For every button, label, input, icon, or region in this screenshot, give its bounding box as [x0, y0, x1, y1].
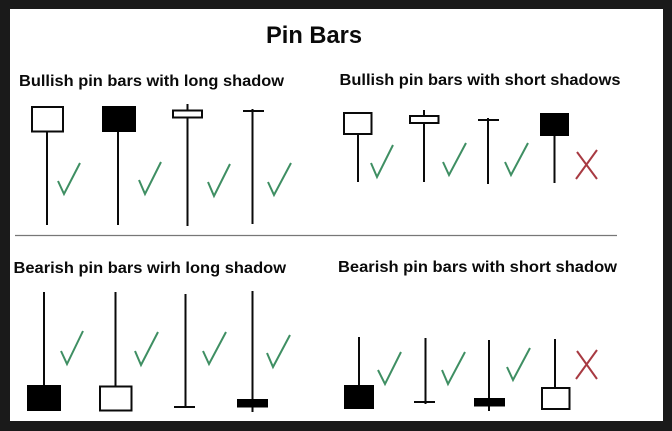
candle: flat bottom	[174, 294, 195, 408]
panel: bearish long shadow	[27, 291, 290, 412]
candle: small hollow body	[173, 104, 202, 226]
check mark	[371, 145, 393, 177]
check mark	[442, 352, 465, 384]
candle: flat top	[243, 109, 264, 224]
candle: small filled body	[237, 291, 268, 412]
cross mark	[576, 350, 597, 379]
candle: small filled body	[474, 340, 505, 411]
cross mark	[576, 150, 597, 179]
check mark	[58, 163, 80, 194]
candle: hollow body, long lower wick	[32, 107, 63, 225]
candle: small hollow body	[410, 110, 438, 182]
candle: hollow body	[542, 339, 570, 409]
check mark	[61, 331, 83, 364]
candle: filled body	[540, 113, 569, 183]
panel: bearish short shadow	[344, 337, 597, 411]
panel: bullish long shadow	[32, 104, 291, 226]
candle: hollow body	[344, 113, 372, 182]
candle: flat bottom	[414, 338, 435, 404]
check mark	[208, 164, 230, 196]
check mark	[378, 352, 401, 384]
check mark	[505, 143, 528, 175]
check mark	[139, 162, 161, 194]
candle: hollow body	[100, 292, 132, 410]
candle: flat top	[478, 118, 499, 184]
panel: bullish short shadows	[344, 110, 597, 184]
candle: filled body, long lower wick	[102, 106, 136, 225]
heading: bullish short shadows: Bullish pin bars with short shadows	[340, 72, 621, 89]
heading: bearish short shadow: Bearish pin bars with short shadow	[338, 259, 618, 276]
candle: filled body	[27, 292, 61, 411]
candle: filled body	[344, 337, 374, 409]
check mark	[268, 163, 291, 195]
heading: bullish long shadow: Bullish pin bars with long shadow	[19, 73, 285, 90]
check mark	[443, 143, 466, 175]
check mark	[203, 332, 226, 364]
check mark	[135, 332, 158, 365]
check mark	[267, 335, 290, 367]
heading: bearish long shadow: Bearish pin bars wirh long shadow	[14, 260, 287, 277]
title: Pin Bars	[266, 22, 362, 49]
check mark	[507, 348, 530, 380]
